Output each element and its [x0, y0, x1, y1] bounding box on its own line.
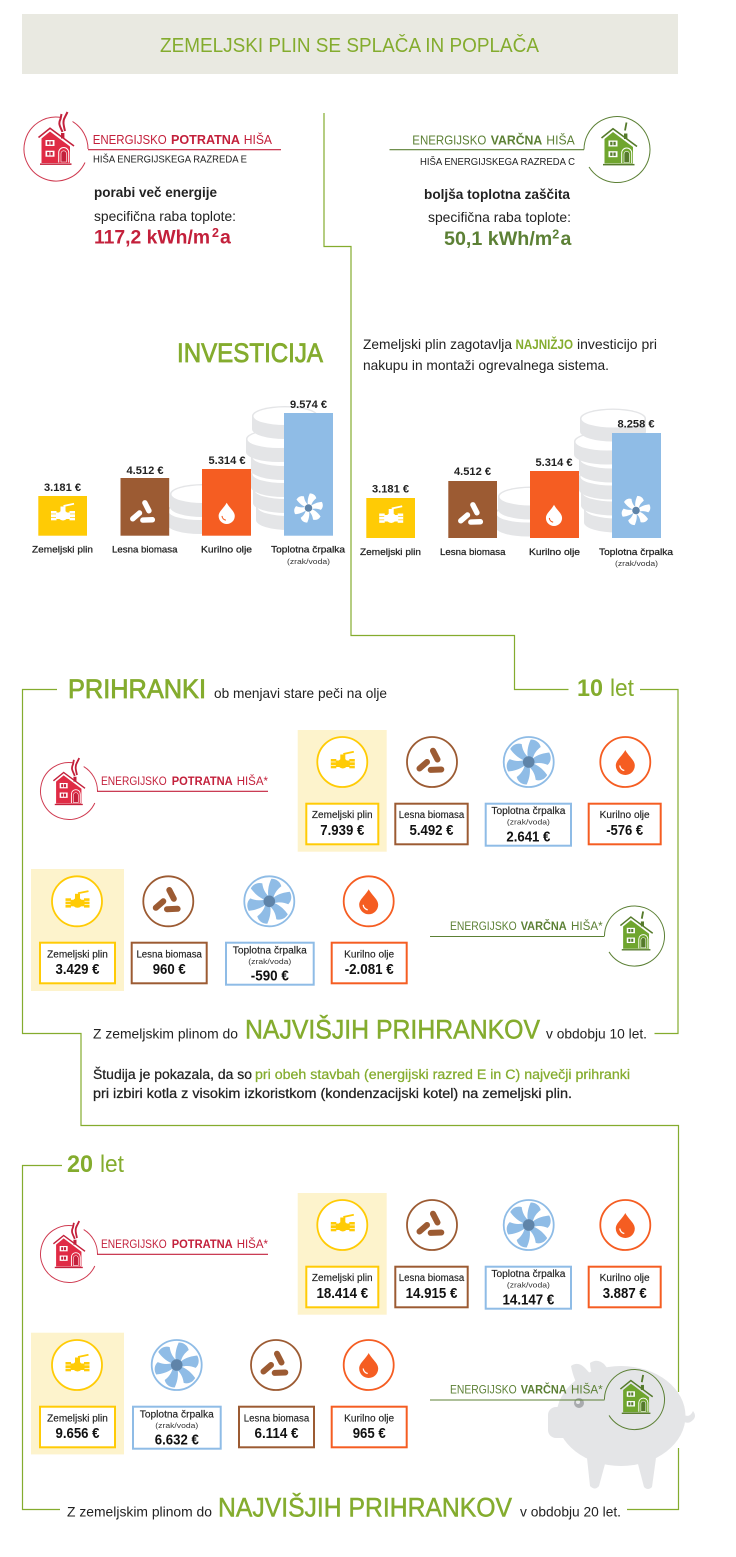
value: 50,1 kWh/m2a: 50,1 kWh/m [444, 228, 552, 250]
heading: highest savings, 20 years [67, 1492, 621, 1522]
label: energy efficient house, 10 years: ENERGIJSKO [450, 921, 517, 933]
card: heating oil -576 [589, 737, 661, 844]
panel: energy efficient house: boljša toplotna zaščita [424, 187, 570, 202]
savings row: efficient house, 10 years [31, 869, 407, 991]
bar: natural gas [32, 482, 93, 556]
decoration: coin stack [167, 406, 322, 534]
text: investment note: nakupu in montaži ogrevalnega sistema. [363, 357, 609, 373]
title banner [22, 14, 678, 74]
bar: natural gas: Zemeljski plin [32, 545, 93, 556]
text: investment note: Zemeljski plin zagotavlja [363, 336, 512, 352]
label: energy wasteful house, 10 years [41, 758, 269, 819]
card: heating oil -576: -576 € [606, 823, 643, 839]
label: energy wasteful house, 20 years: POTRATNA [172, 1239, 233, 1251]
bar: heat pump: Toplotna črpalka [271, 545, 346, 556]
chart: investment energy efficient [360, 408, 674, 568]
heading: energy efficient house [412, 133, 575, 148]
label: energy efficient house, 20 years: HIŠA* [571, 1384, 603, 1396]
decoration: coin stack [495, 408, 650, 536]
bar: wood biomass: 4.512 € [126, 465, 164, 477]
bar: heat pump: 9.574 € [290, 399, 327, 411]
card: heat pump -590: -590 € [251, 969, 289, 985]
card: wood biomass 6.114: 6.114 € [254, 1426, 298, 1442]
label: energy wasteful house, 10 years: ENERGIJSKO [101, 776, 167, 788]
text: investment note: investicijo pri [577, 336, 657, 352]
card: natural gas 9.656: 9.656 € [56, 1426, 100, 1442]
text: study conclusion: pri izbiri kotla z visokim izkoristkom (kondenzacijski kotel) na zemeljski plin. [93, 1086, 572, 1101]
heading: energy wasteful house: POTRATNA [171, 132, 241, 147]
label: energy efficient house, 20 years: ENERGIJSKO [450, 1384, 517, 1396]
card: heating oil 3.887 [589, 1200, 661, 1307]
card: heat pump 2.641: (zrak/voda) [507, 818, 550, 827]
card: heat pump 14.147: Toplotna črpalka [491, 1269, 566, 1280]
card: heating oil -2.081: -2.081 € [345, 962, 394, 978]
label: energy wasteful house, 20 years: HIŠA* [237, 1238, 269, 1251]
bar: heat pump: (zrak/voda) [615, 559, 659, 568]
heading: energy efficient house: HIŠA [546, 133, 575, 148]
label: energy efficient house, 20 years [430, 1370, 665, 1430]
card: heating oil -2.081 [332, 876, 407, 983]
heading: highest savings, 10 years: NAJVIŠJIH PRIHRANKOV [245, 1014, 540, 1044]
bar: heating oil: Kurilno olje [529, 547, 580, 558]
card: heat pump 2.641: 2.641 € [506, 830, 550, 846]
card: wood biomass 5.492 [395, 737, 468, 844]
bar: heat pump: (zrak/voda) [287, 557, 331, 566]
panel: energy wasteful house [24, 112, 281, 248]
card: heating oil -576: Kurilno olje [600, 810, 650, 821]
text: investment note: NAJNIŽJO [516, 335, 573, 352]
label: energy wasteful house, 20 years: ENERGIJSKO [101, 1239, 167, 1251]
card: heat pump -590 [226, 876, 314, 985]
heading: highest savings, 10 years: v obdobju 10 let. [546, 1026, 647, 1042]
icon: red house [24, 112, 88, 181]
card: natural gas 18.414: Zemeljski plin [312, 1273, 373, 1284]
heading: energy wasteful house [93, 132, 272, 147]
panel: energy wasteful house: HIŠA ENERGIJSKEGA RAZREDA E [93, 153, 247, 166]
heading: highest savings, 20 years: Z zemeljskim plinom do [67, 1504, 212, 1520]
card: natural gas 7.939 [298, 730, 387, 852]
heading: prihranki: ob menjavi stare peči na olje [214, 685, 387, 701]
bar: natural gas: 3.181 € [44, 482, 81, 494]
heading: 10 let: let [610, 675, 634, 702]
icon: green house [584, 117, 650, 183]
card: heating oil -2.081: Kurilno olje [344, 950, 395, 961]
bar: natural gas: 3.181 € [372, 484, 409, 496]
label: energy wasteful house, 10 years: POTRATNA [172, 776, 233, 788]
heading: highest savings, 10 years [93, 1014, 647, 1044]
bar: wood biomass [440, 466, 506, 558]
panel: energy efficient house: specifična raba toplote: [428, 209, 571, 225]
card: natural gas 3.429 [31, 869, 124, 991]
bar: natural gas: Zemeljski plin [360, 547, 421, 558]
card: natural gas 7.939: 7.939 € [320, 823, 364, 839]
heading: 10 let: 10 [577, 675, 603, 702]
bar: wood biomass [112, 465, 178, 556]
text: study conclusion: Študija je pokazala, da so [93, 1067, 252, 1082]
card: heat pump 14.147: 14.147 € [503, 1293, 554, 1309]
heading: energy wasteful house: ENERGIJSKO [93, 132, 167, 147]
card: heating oil 3.887: 3.887 € [603, 1286, 647, 1302]
card: heating oil 965: 965 € [353, 1426, 386, 1442]
card: natural gas 3.429: 3.429 € [56, 962, 100, 978]
value: 117,2 kWh/m2a: 2 [212, 226, 219, 240]
card: wood biomass 14.915 [395, 1200, 468, 1307]
value: 117,2 kWh/m2a: 117,2 kWh/m [94, 226, 210, 248]
panel: energy efficient house: HIŠA ENERGIJSKEGA RAZREDA C [420, 155, 575, 168]
card: wood biomass 6.114: Lesna biomasa [244, 1414, 310, 1425]
connector lines [22, 113, 678, 1510]
heading: 20 let: 20 [67, 1151, 93, 1178]
value: 50,1 kWh/m2a: 2 [552, 228, 559, 242]
card: wood biomass 5.492: Lesna biomasa [399, 810, 465, 821]
card: natural gas 18.414 [298, 1193, 387, 1315]
value: 50,1 kWh/m2a: a [560, 228, 572, 250]
bar: heating oil [201, 455, 252, 556]
text: investment note [363, 335, 657, 373]
label: energy efficient house, 10 years: HIŠA* [571, 920, 603, 933]
bar: heating oil [529, 457, 580, 558]
decoration: piggy bank [548, 1361, 695, 1489]
heading: prihranki: PRIHRANKI [68, 674, 206, 704]
card: heat pump 6.632: Toplotna črpalka [140, 1410, 214, 1421]
card: natural gas 9.656 [31, 1333, 124, 1454]
heading: 10 let [577, 675, 634, 702]
bar: heating oil: Kurilno olje [201, 545, 252, 556]
bar: natural gas [360, 484, 421, 558]
title banner: ZEMELJSKI PLIN SE SPLAČA IN POPLAČA [160, 34, 540, 57]
heading: 20 let [67, 1151, 124, 1178]
bar: wood biomass: 4.512 € [454, 466, 491, 478]
heading: prihranki [68, 674, 387, 704]
card: heat pump 14.147 [486, 1200, 571, 1309]
card: heat pump -590: Toplotna črpalka [233, 946, 307, 957]
card: heat pump 6.632: 6.632 € [155, 1433, 199, 1449]
text: study conclusion: pri obeh stavbah (energijski razred E in C) največji prihranki [255, 1067, 630, 1082]
value: 117,2 kWh/m2a: a [220, 226, 231, 248]
heading: energy efficient house: ENERGIJSKO [412, 133, 486, 148]
card: heating oil 3.887: Kurilno olje [600, 1273, 650, 1284]
card: heat pump 14.147: (zrak/voda) [507, 1281, 550, 1290]
card: wood biomass 960 [132, 876, 207, 983]
heading: investicija: INVESTICIJA [177, 338, 323, 368]
heading: highest savings, 10 years: Z zemeljskim plinom do [93, 1026, 238, 1042]
card: heat pump 2.641 [486, 737, 571, 846]
label: energy efficient house, 20 years: VARČNA [521, 1384, 567, 1396]
card: heat pump 6.632: (zrak/voda) [155, 1421, 199, 1430]
card: wood biomass 960: 960 € [153, 962, 186, 978]
card: wood biomass 14.915: 14.915 € [406, 1286, 457, 1302]
bar: wood biomass: Lesna biomasa [112, 545, 178, 556]
savings row: wasteful house, 10 years [298, 730, 661, 852]
bar: heat pump [599, 419, 674, 568]
panel: energy wasteful house: specifična raba toplote: [94, 208, 236, 224]
savings row: efficient house, 20 years [31, 1333, 407, 1454]
chart: investment energy wasteful [32, 399, 346, 566]
bar: wood biomass: Lesna biomasa [440, 547, 506, 558]
card: heating oil 965 [332, 1340, 407, 1447]
card: heat pump 6.632 [133, 1340, 221, 1449]
bar: heat pump: 8.258 € [618, 419, 654, 431]
card: natural gas 9.656: Zemeljski plin [47, 1414, 108, 1425]
card: natural gas 3.429: Zemeljski plin [47, 950, 108, 961]
heading: energy wasteful house: HIŠA [244, 132, 272, 147]
panel: energy efficient house [390, 117, 650, 250]
heading: 20 let: let [100, 1151, 124, 1178]
card: wood biomass 14.915: Lesna biomasa [399, 1273, 465, 1284]
card: heat pump -590: (zrak/voda) [248, 957, 292, 966]
label: energy wasteful house, 20 years [41, 1221, 269, 1282]
card: natural gas 18.414: 18.414 € [316, 1286, 368, 1302]
heading: energy efficient house: VARČNA [491, 133, 543, 148]
label: energy efficient house, 10 years: VARČNA [521, 920, 567, 933]
card: wood biomass 5.492: 5.492 € [410, 823, 454, 839]
bar: heating oil: 5.314 € [208, 455, 246, 467]
card: natural gas 7.939: Zemeljski plin [312, 810, 373, 821]
text: study conclusion [93, 1067, 630, 1101]
card: heat pump 2.641: Toplotna črpalka [491, 806, 566, 817]
bar: heat pump: Toplotna črpalka [599, 547, 674, 558]
savings row: wasteful house, 20 years [298, 1193, 661, 1315]
label: energy wasteful house, 10 years: HIŠA* [237, 775, 269, 788]
card: wood biomass 6.114 [239, 1340, 314, 1447]
bar: heat pump [271, 399, 346, 566]
bar: heating oil: 5.314 € [536, 457, 572, 469]
heading: highest savings, 20 years: NAJVIŠJIH PRIHRANKOV [218, 1492, 512, 1522]
card: wood biomass 960: Lesna biomasa [136, 950, 202, 961]
card: heating oil 965: Kurilno olje [344, 1414, 395, 1425]
panel: energy wasteful house: porabi več energije [94, 185, 217, 200]
label: energy efficient house, 10 years [430, 906, 665, 966]
heading: highest savings, 20 years: v obdobju 20 let. [520, 1504, 621, 1520]
